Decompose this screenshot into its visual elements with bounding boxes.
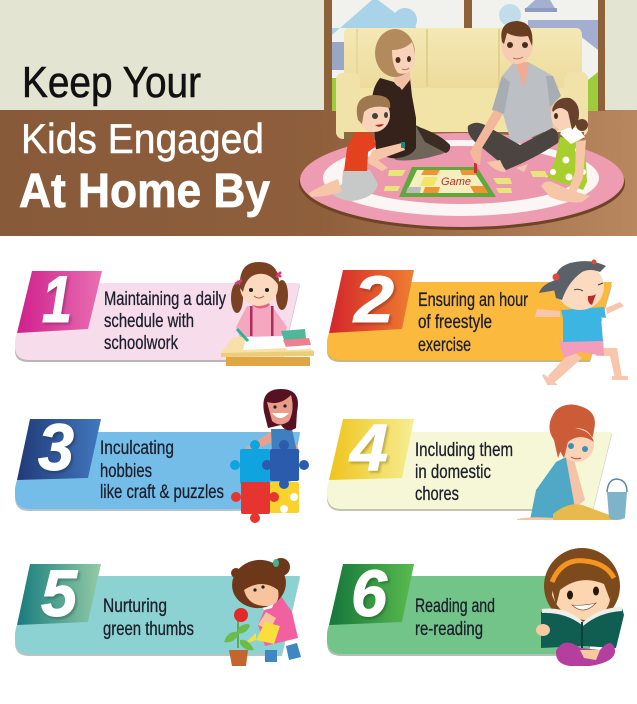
header panel	[0, 0, 637, 236]
panel 2: exercise: 2	[352, 262, 394, 336]
icon: woman with puzzle	[230, 389, 309, 523]
title: At Home By	[19, 165, 270, 218]
sofa	[336, 28, 588, 139]
panel 5: green thumbs	[15, 556, 301, 666]
board game	[384, 163, 548, 197]
text: step 6: Reading and	[415, 596, 495, 617]
window	[324, 0, 605, 111]
text: step 6: re-reading	[415, 619, 483, 640]
panel 6: reading: 6	[351, 556, 388, 630]
text: step 2	[418, 290, 529, 356]
panel 4: chores: 4	[348, 410, 388, 484]
icon: running girl	[535, 260, 628, 384]
text: step 2: Ensuring an hour	[418, 290, 529, 311]
panel 2: exercise	[327, 260, 628, 384]
text: step 4	[415, 440, 513, 505]
panel 3: hobbies	[15, 389, 309, 523]
icon: child reading book	[536, 548, 624, 666]
panel 5: green thumbs: 5	[41, 556, 78, 630]
text: step 5: Nurturing	[103, 596, 167, 617]
text: step 3: hobbies	[100, 461, 152, 482]
text: step 6	[415, 596, 495, 640]
text: step 1	[104, 289, 226, 354]
text: step 4: Including them	[415, 440, 513, 461]
text: step 2: exercise	[418, 335, 471, 356]
boy	[309, 95, 405, 201]
panel 1: schoolwork	[15, 262, 314, 366]
icon: girl watering flower	[224, 556, 301, 666]
board game: Game	[441, 176, 471, 188]
mother	[372, 29, 450, 160]
text: step 3: Inculcating	[100, 438, 174, 459]
panel 3: hobbies: 3	[38, 410, 74, 484]
rug	[299, 133, 625, 230]
text: step 4: in domestic	[415, 462, 491, 483]
text: step 5: green thumbs	[103, 619, 194, 640]
text: step 4: chores	[415, 484, 459, 505]
title: Keep Your	[22, 58, 201, 107]
title	[19, 58, 270, 218]
text: step 3	[100, 438, 224, 503]
icon: girl mopping floor	[517, 404, 627, 520]
text: step 2: of freestyle	[418, 312, 492, 333]
girl on rug	[541, 98, 590, 202]
text: step 1: schoolwork	[104, 333, 178, 354]
text: step 3: like craft & puzzles	[100, 482, 224, 503]
text: step 1: Maintaining a daily	[104, 289, 226, 310]
icon: girl at desk	[221, 262, 314, 366]
panel 6: reading	[327, 548, 624, 666]
text: step 5	[103, 596, 194, 640]
panel 1: schoolwork: 1	[42, 262, 72, 336]
text: step 1: schedule with	[104, 311, 194, 332]
panel 4: chores	[327, 404, 627, 520]
father	[468, 21, 563, 172]
title: Kids Engaged	[21, 115, 264, 162]
